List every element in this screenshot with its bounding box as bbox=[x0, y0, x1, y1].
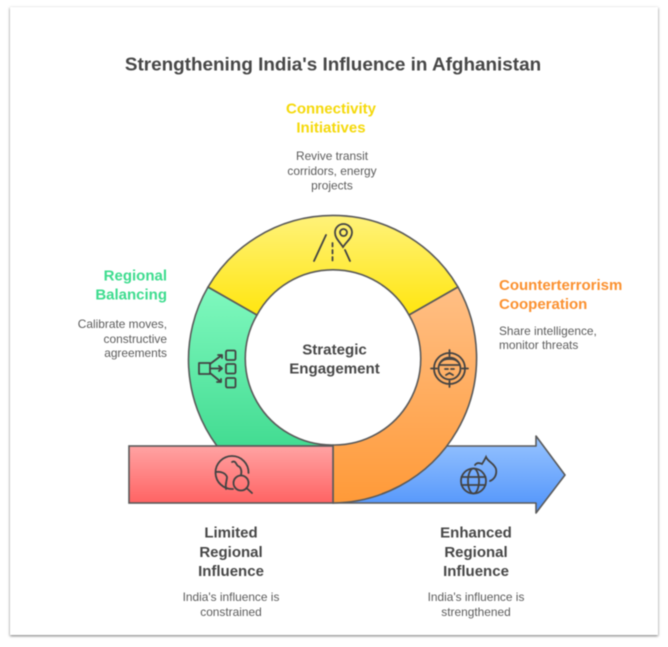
icon: road with location pin bbox=[314, 224, 352, 262]
center label bbox=[289, 342, 380, 378]
label: enhanced regional influence: India's influence is bbox=[428, 590, 524, 604]
bar: limited regional influence bbox=[129, 446, 333, 503]
label: counterterrorism cooperation: Counterterrorism bbox=[499, 277, 622, 294]
label: limited regional influence: constrained bbox=[200, 605, 262, 619]
ring segment: counterterrorism cooperation bbox=[333, 287, 477, 503]
label: connectivity initiatives: Initiatives bbox=[296, 120, 366, 136]
label: enhanced regional influence: strengthened bbox=[441, 605, 511, 619]
label: regional balancing bbox=[78, 268, 167, 360]
label: regional balancing: agreements bbox=[104, 346, 167, 360]
label: limited regional influence: Influence bbox=[198, 563, 264, 580]
icon: globe with flame bbox=[461, 457, 496, 494]
ring segment: connectivity initiatives bbox=[208, 215, 458, 315]
label: enhanced regional influence: Regional bbox=[444, 544, 508, 561]
label: limited regional influence bbox=[183, 524, 279, 619]
label: limited regional influence: India's influence is bbox=[183, 590, 279, 604]
label: connectivity initiatives: Connectivity bbox=[286, 100, 377, 118]
arrow: enhanced regional influence bbox=[333, 436, 565, 513]
label: connectivity initiatives bbox=[286, 100, 377, 192]
label: regional balancing: Balancing bbox=[95, 286, 167, 304]
title: Strengthening India's Influence in Afghanistan bbox=[125, 54, 541, 76]
label: limited regional influence: Limited bbox=[204, 524, 258, 542]
label: regional balancing: constructive bbox=[104, 332, 167, 346]
ring segment: regional balancing bbox=[188, 287, 333, 446]
label: regional balancing: Regional bbox=[104, 268, 167, 284]
label: counterterrorism cooperation: Cooperation bbox=[499, 296, 587, 313]
icon: target on masked face bbox=[431, 350, 468, 387]
center label: Strategic bbox=[302, 342, 367, 358]
icon: branching flow bbox=[199, 350, 236, 388]
label: counterterrorism cooperation: Share intelligence, bbox=[499, 324, 597, 338]
icon: globe with magnifier bbox=[216, 456, 252, 493]
label: counterterrorism cooperation: monitor threats bbox=[499, 338, 578, 352]
label: limited regional influence: Regional bbox=[199, 544, 263, 561]
label: regional balancing: Calibrate moves, bbox=[78, 317, 167, 331]
label: connectivity initiatives: Revive transit bbox=[296, 149, 369, 163]
label: enhanced regional influence bbox=[428, 524, 524, 619]
label: counterterrorism cooperation bbox=[499, 277, 622, 352]
label: connectivity initiatives: projects bbox=[311, 178, 353, 192]
center label: Engagement bbox=[289, 360, 380, 378]
label: connectivity initiatives: corridors, energy bbox=[287, 164, 377, 178]
label: enhanced regional influence: Influence bbox=[443, 563, 509, 580]
label: enhanced regional influence: Enhanced bbox=[440, 524, 512, 542]
